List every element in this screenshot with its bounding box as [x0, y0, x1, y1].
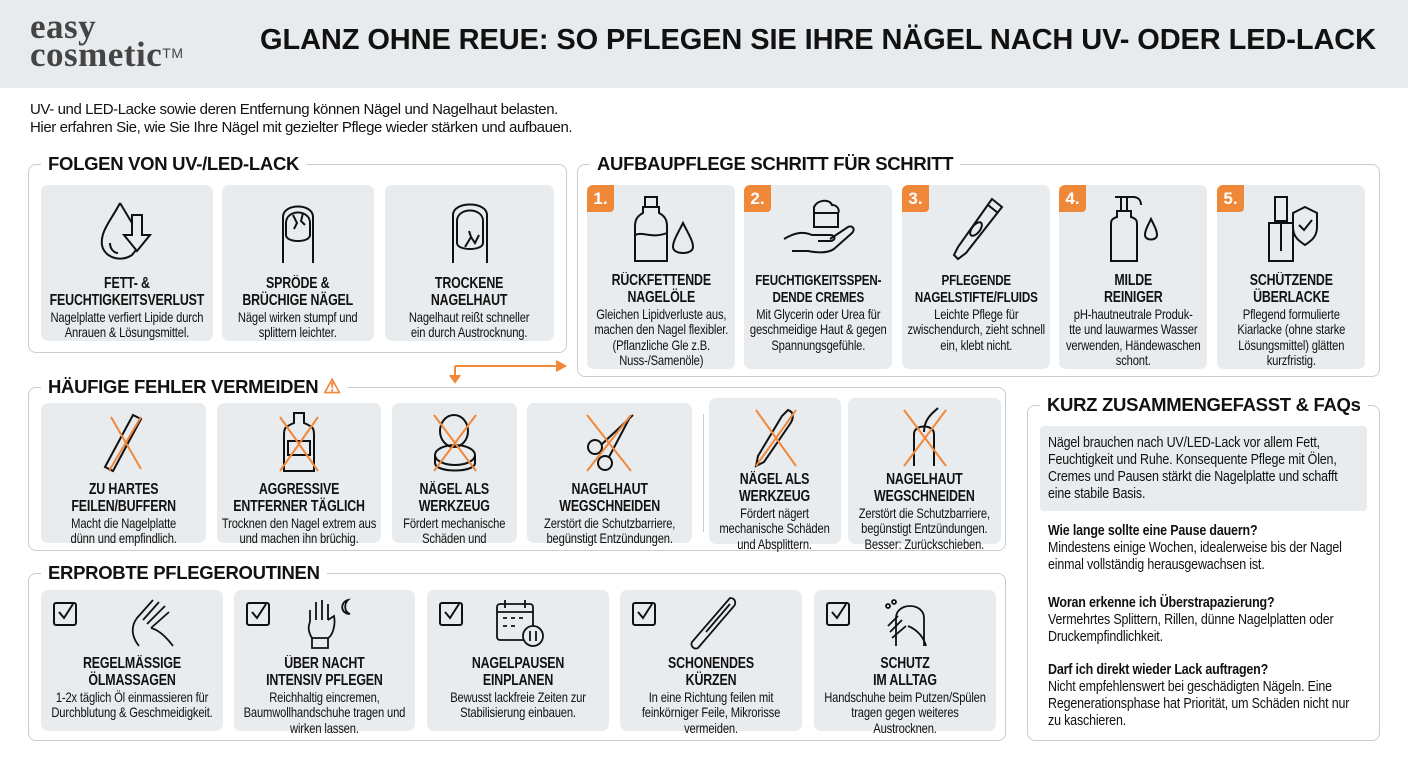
card 4: Milde Reiniger: MILDE — [1114, 272, 1152, 289]
card: Schutz im Alltag: Handschuhe beim Putzen/Spülen tragen gegen weiteres Austrocknen. — [824, 689, 986, 736]
card: Aggressive Entferner: AGGRESSIVE — [259, 481, 339, 498]
card: Nagelpausen einplanen — [427, 590, 609, 731]
card: Nagelpausen einplanen: NAGELPAUSEN — [472, 655, 564, 672]
card 3: Pflegende Nagelstifte: 3. — [908, 189, 923, 208]
card: Nagelpausen einplanen: Bewusst lackfreie Zeiten zur Stabilisierung einbauen. — [450, 689, 586, 720]
card: Nagelhaut wegschneiden — [527, 403, 692, 543]
faq 1: Wie lange sollte eine Pause dauern? — [1048, 523, 1257, 539]
card: Schonendes Kürzen: KÜRZEN — [686, 672, 736, 688]
card: Regelmäßige Ölmassagen — [41, 590, 223, 731]
card: Nagelhaut wegschneiden: NAGELHAUT — [571, 481, 648, 498]
card 5: Schützende Überlacke: SCHÜTZENDE — [1249, 272, 1333, 289]
arrow: orange connector — [449, 360, 567, 384]
card: Nägel als Werkzeug 2: WERKZEUG — [739, 488, 811, 504]
card: Zu hartes Feilen: FEILEN/BUFFERN — [71, 498, 176, 514]
card: Spröde & brüchige Nägel — [222, 185, 374, 341]
card: Nägel als Werkzeug: WERKZEUG — [419, 498, 490, 514]
faq 3: Nicht empfehlenswert bei geschädigten Nägeln. Eine Regenerationsphase hat Priorität, um Schäden nicht nur zu kaschieren. — [1048, 679, 1349, 729]
card 3: Pflegende Nagelstifte: PFLEGENDE — [941, 273, 1011, 289]
card 3: Pflegende Nagelstifte: NAGELSTIFTE/FLUIDS — [915, 290, 1037, 306]
card: Spröde & brüchige Nägel: BRÜCHIGE NÄGEL — [243, 292, 353, 308]
card: Schonendes Kürzen: In eine Richtung feilen mit feinkörniger Feile, Mikrorisse vermeiden. — [642, 689, 780, 736]
summary box: Nägel brauchen nach UV/LED-Lack vor allem Fett, Feuchtigkeit und Ruhe. Konsequente Pflege mit Ölen, Cremes und Pausen stärkt die Nagelplatte und schafft eine stabile Basis. — [1048, 435, 1338, 502]
card: Schonendes Kürzen — [620, 590, 802, 731]
card: Schonendes Kürzen: SCHONENDES — [668, 655, 754, 672]
card: Nagelhaut wegschneiden 2: WEGSCHNEIDEN — [874, 488, 975, 504]
faq 2: Woran erkenne ich Überstrapazierung? — [1048, 595, 1274, 611]
intro text — [30, 101, 572, 136]
logo — [30, 7, 183, 74]
card 1: Rückfettende Nagelöle: RÜCKFETTENDE — [611, 272, 711, 289]
panel: Häufige Fehler vermeiden — [28, 387, 1006, 551]
summary box — [1040, 426, 1367, 511]
card 1: Rückfettende Nagelöle: Gleichen Lipidverluste aus, machen den Nagel flexibler. (Pflanzliche Gle z.B. Nuss-/Samenöle) — [594, 306, 728, 368]
card 5: Schützende Überlacke: 5. — [1223, 189, 1238, 208]
card: Fett- & Feuchtigkeitsverlust: FETT- & — [104, 275, 150, 292]
card 2: Feuchtigkeitsspendende Cremes — [744, 185, 892, 369]
faq 2 — [1048, 594, 1334, 645]
panel: Folgen von UV-/LED-Lack — [28, 164, 567, 353]
card: Nägel als Werkzeug 2: NÄGEL ALS — [740, 471, 810, 488]
text: ERPROBTE PFLEGEROUTINEN — [48, 562, 320, 583]
text: AUFBAUPFLEGE SCHRITT FÜR SCHRITT — [597, 153, 953, 174]
card: Trockene Nagelhaut: TROCKENE — [435, 275, 504, 292]
card: Nagelhaut wegschneiden 2: Zerstört die Schutzbarriere, begünstigt Entzündungen. Besser: Zurückschieben. — [859, 505, 990, 552]
card: Spröde & brüchige Nägel: Nägel wirken stumpf und splittern leichter. — [238, 309, 358, 340]
card: Zu hartes Feilen: dünn und empfindlich. — [70, 530, 177, 546]
intro text: Hier erfahren Sie, wie Sie Ihre Nägel mit gezielter Pflege wieder stärken und aufbauen. — [30, 119, 572, 136]
card 4: Milde Reiniger: pH-hautneutrale Produk- — [1074, 306, 1192, 322]
logo: cosmeticTM — [30, 35, 183, 74]
card 2: Feuchtigkeitsspendende Cremes: DENDE CREMES — [772, 290, 864, 306]
card 3: Pflegende Nagelstifte: Leichte Pflege für zwischendurch, zieht schnell ein, klebt nicht. — [907, 306, 1045, 353]
card: Aggressive Entferner: ENTFERNER TÄGLICH — [233, 498, 365, 514]
text: KURZ ZUSAMMENGEFASST & FAQs — [1047, 394, 1361, 415]
card: Schutz im Alltag: IM ALLTAG — [873, 672, 937, 688]
card 4: Milde Reiniger: REINIGER — [1104, 288, 1162, 306]
card 2: Feuchtigkeitsspendende Cremes: 2. — [750, 189, 765, 208]
card: Über Nacht intensiv pflegen: INTENSIV PFLEGEN — [266, 672, 383, 688]
header band — [0, 0, 1408, 88]
card: Zu hartes Feilen: ZU HARTES — [89, 481, 158, 498]
card: Nagelhaut wegschneiden 2 — [848, 398, 1001, 544]
panel: Aufbaupflege Schritt für Schritt — [577, 164, 1380, 377]
card: Nägel als Werkzeug: Schäden und — [422, 530, 487, 546]
card: Regelmäßige Ölmassagen: 1-2x täglich Öl einmassieren für Durchblutung & Geschmeidigkeit. — [51, 689, 213, 720]
card: Regelmäßige Ölmassagen: ÖLMASSAGEN — [88, 672, 176, 688]
card 4: Milde Reiniger — [1059, 185, 1207, 369]
text: FOLGEN VON UV-/LED-LACK — [48, 153, 299, 174]
card: Über Nacht intensiv pflegen: Reichhaltig eincremen, Baumwollhandschuhe tragen und wirken lassen. — [244, 689, 405, 736]
card: Nagelhaut wegschneiden: Zerstört die Schutzbarriere, begünstigt Entzündungen. — [544, 515, 675, 546]
card 5: Schützende Überlacke: ÜBERLACKE — [1253, 288, 1329, 306]
card 1: Rückfettende Nagelöle — [587, 185, 735, 369]
title: GLANZ OHNE REUE: SO PFLEGEN SIE IHRE NÄGEL NACH UV- ODER LED-LACK — [260, 24, 1376, 56]
card: Nägel als Werkzeug: Fördert mechanische — [403, 515, 506, 531]
card: Trockene Nagelhaut: NAGELHAUT — [431, 292, 508, 308]
card: Nagelpausen einplanen: EINPLANEN — [483, 672, 553, 688]
card: Regelmäßige Ölmassagen: REGELMÄSSIGE — [83, 655, 181, 672]
intro text: UV- und LED-Lacke sowie deren Entfernung können Nägel und Nagelhaut belasten. — [30, 101, 558, 118]
card: Fett- & Feuchtigkeitsverlust: Nagelplatte verfiert Lipide durch Anrauen & Lösungsmittel. — [51, 309, 203, 340]
panel: Erprobte Pflegeroutinen — [28, 573, 1006, 741]
card: Nägel als Werkzeug 2 — [709, 398, 841, 544]
card: Aggressive Entferner: Trocknen den Nagel extrem aus und machen ihn brüchig. — [222, 515, 376, 546]
logo: easy — [30, 7, 96, 46]
card: Über Nacht intensiv pflegen: ÜBER NACHT — [284, 655, 365, 672]
panel: Kurz zusammengefasst & FAQs — [1027, 405, 1380, 741]
card: Trockene Nagelhaut — [385, 185, 554, 341]
card: Schutz im Alltag — [814, 590, 996, 731]
card: Aggressive Entferner — [217, 403, 381, 543]
card 4: Milde Reiniger: 4. — [1065, 189, 1080, 208]
card 2: Feuchtigkeitsspendende Cremes: FEUCHTIGKEITSSPEN- — [755, 273, 881, 289]
faq 2: Vermehrtes Splittern, Rillen, dünne Nagelplatten oder Druckempfindlichkeit. — [1048, 612, 1333, 645]
card 1: Rückfettende Nagelöle: 1. — [593, 189, 608, 208]
card: Nagelhaut wegschneiden 2: NAGELHAUT — [886, 471, 963, 488]
card 5: Schützende Überlacke — [1217, 185, 1365, 369]
card 4: Milde Reiniger: tte und lauwarmes Wasser verwenden, Händewaschen schont. — [1066, 321, 1200, 368]
card: Nägel als Werkzeug 2: Fördert nägert mechanische Schäden und Absplittern. — [720, 505, 830, 552]
card 5: Schützende Überlacke: Pflegend formulierte Kiarlacke (ohne starke Lösungsmittel) glätten kurzfristig. — [1237, 306, 1345, 368]
card: Fett- & Feuchtigkeitsverlust: FEUCHTIGKEITSVERLUST — [50, 292, 204, 308]
card: Schutz im Alltag: SCHUTZ — [880, 655, 930, 672]
faq 1: Mindestens einige Wochen, idealerweise bis der Nagel einmal vollständig herausgewachsen ist. — [1048, 540, 1342, 573]
card: Nagelhaut wegschneiden: WEGSCHNEIDEN — [559, 498, 660, 514]
faq 3: Darf ich direkt wieder Lack auftragen? — [1048, 662, 1268, 678]
card: Trockene Nagelhaut: ein durch Austrocknung. — [411, 324, 528, 340]
card: Spröde & brüchige Nägel: SPRÖDE & — [266, 275, 330, 292]
card 3: Pflegende Nagelstifte — [902, 185, 1050, 369]
card 2: Feuchtigkeitsspendende Cremes: Mit Glycerin oder Urea für geschmeidige Haut & gegen Spannungsgefühle. — [750, 306, 886, 353]
card: Nägel als Werkzeug: NÄGEL ALS — [420, 481, 489, 498]
panel: Häufige Fehler vermeiden: HÄUFIGE FEHLER VERMEIDEN ⚠ — [48, 376, 341, 398]
faq 1 — [1048, 523, 1342, 573]
card: Über Nacht intensiv pflegen — [234, 590, 415, 731]
card: Trockene Nagelhaut: Nagelhaut reißt schneller — [409, 309, 530, 325]
card: Zu hartes Feilen — [41, 403, 206, 543]
card: Nägel als Werkzeug — [392, 403, 517, 543]
card: Fett- & Feuchtigkeitsverlust — [41, 185, 213, 341]
card: Zu hartes Feilen: Macht die Nagelplatte — [71, 515, 176, 531]
card 1: Rückfettende Nagelöle: NAGELÖLE — [627, 288, 695, 306]
